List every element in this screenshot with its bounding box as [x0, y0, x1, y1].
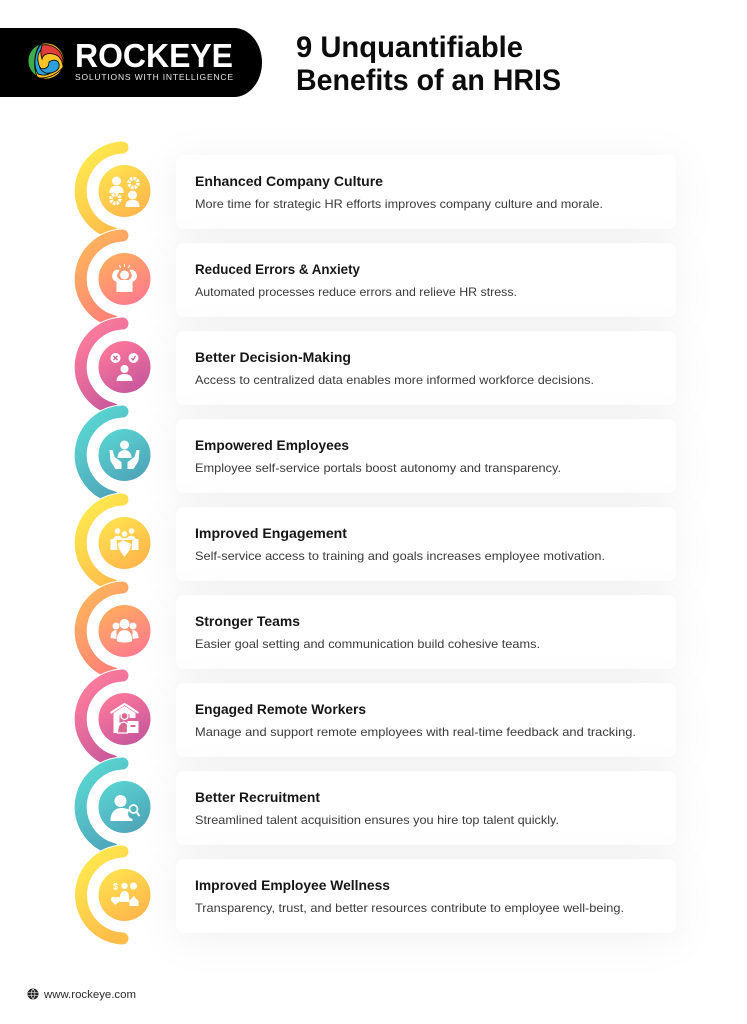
title: Benefits of an HRIS [296, 64, 561, 97]
card heading: Engaged Remote Workers [195, 702, 366, 717]
panel: Enhanced Company Culture [81, 148, 676, 233]
card heading: Enhanced Company Culture [195, 174, 384, 189]
panel: Reduced Errors and Anxiety [81, 236, 676, 321]
icon: stressed person [112, 264, 137, 292]
icon: globe [28, 989, 38, 999]
icon: remote worker at home [110, 704, 138, 733]
card text: Self-service access to training and goals increases employee motivation. [195, 550, 605, 563]
icon: rockeye swirl logo [28, 43, 64, 79]
panel: Empowered Employees [81, 412, 676, 497]
title [296, 31, 561, 97]
icon: team of three [110, 619, 138, 642]
card heading: Reduced Errors & Anxiety [195, 262, 360, 277]
icon: employee wellness: $ [113, 882, 118, 892]
card text: Streamlined talent acquisition ensures you hire top talent quickly. [195, 814, 559, 827]
card text: Access to centralized data enables more informed workforce decisions. [195, 374, 594, 387]
card heading: Better Recruitment [195, 790, 321, 805]
footer website [28, 989, 136, 1001]
card text: Easier goal setting and communication build cohesive teams. [195, 638, 540, 651]
card heading: Better Decision-Making [195, 350, 351, 365]
card heading: Improved Employee Wellness [195, 878, 390, 893]
card text: Manage and support remote employees with real-time feedback and tracking. [195, 726, 636, 739]
card heading: Empowered Employees [195, 438, 349, 453]
title: 9 Unquantifiable [296, 31, 523, 64]
icon: hands holding person [110, 440, 140, 469]
header logo badge [0, 28, 262, 97]
panel: Better Recruitment [81, 764, 676, 849]
panel: Stronger Teams [81, 588, 676, 673]
icon: handshake with team [110, 528, 138, 557]
panel: Engaged Remote Workers [81, 676, 676, 761]
card text: Automated processes reduce errors and relieve HR stress. [195, 286, 517, 299]
icon: employee wellness [111, 882, 138, 906]
card text: Transparency, trust, and better resources contribute to employee well-being. [195, 902, 624, 915]
card text: More time for strategic HR efforts improves company culture and morale. [195, 198, 603, 211]
panel: Improved Engagement [81, 500, 676, 585]
icon: decision person [110, 353, 138, 381]
panel: Improved Employee Wellness [81, 852, 676, 938]
icon: person with magnifier [110, 795, 140, 821]
logo wordmark: ROCKEYE [75, 37, 233, 74]
card heading: Stronger Teams [195, 614, 300, 629]
icon: people and gears [110, 176, 140, 207]
website address: www.rockeye.com [43, 989, 136, 1001]
card heading: Improved Engagement [195, 526, 348, 541]
logo tagline: SOLUTIONS WITH INTELLIGENCE [75, 72, 233, 82]
panel: Better Decision-Making [81, 324, 676, 409]
card text: Employee self-service portals boost autonomy and transparency. [195, 462, 561, 475]
